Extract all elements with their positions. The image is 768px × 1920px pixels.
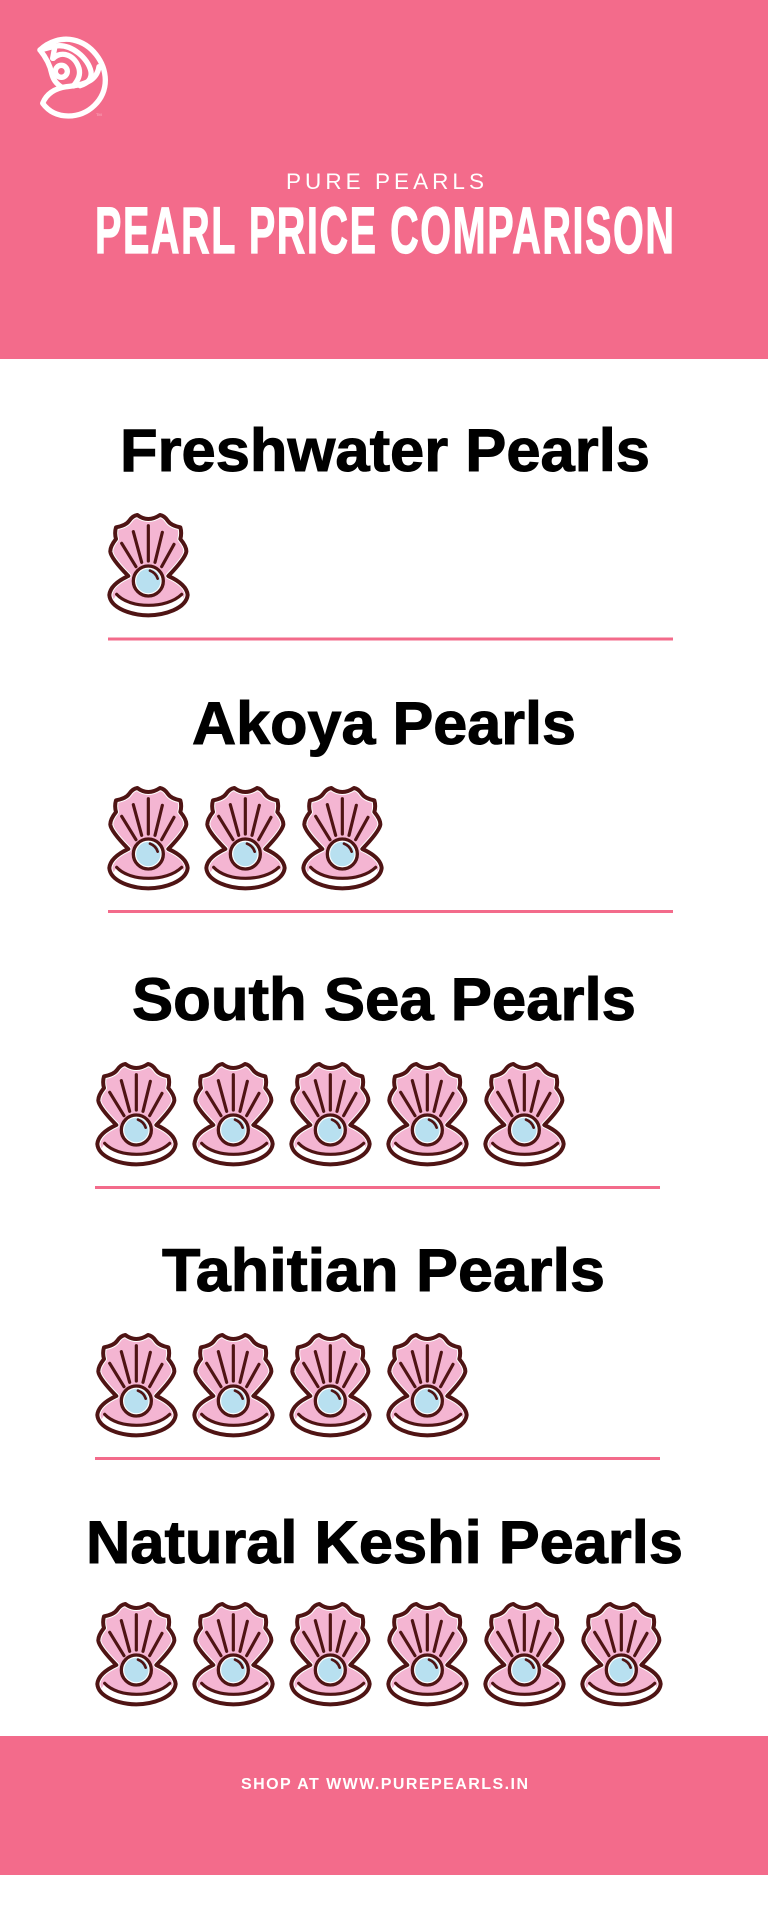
footer band — [0, 1736, 768, 1875]
panel: Natural Keshi Pearls — [86, 1509, 683, 1707]
heading: South Sea Pearls — [132, 966, 636, 1033]
panel: South Sea Pearls — [95, 966, 660, 1189]
logo — [40, 39, 105, 117]
panel: Tahitian Pearls — [95, 1237, 660, 1460]
logo: TM — [96, 112, 102, 117]
heading: Natural Keshi Pearls — [86, 1509, 683, 1576]
panel: Akoya Pearls — [108, 690, 673, 913]
icon: shell rating — [97, 1335, 467, 1438]
footer text: SHOP AT WWW.PUREPEARLS.IN — [241, 1776, 528, 1793]
heading: Tahitian Pearls — [162, 1237, 605, 1304]
heading: Freshwater Pearls — [120, 417, 650, 484]
title: PEARL PRICE COMPARISON — [95, 194, 674, 268]
icon: shell rating — [97, 1604, 661, 1707]
header band — [0, 0, 768, 359]
heading: Akoya Pearls — [192, 690, 576, 757]
brand name: PURE PEARLS — [286, 169, 484, 194]
panel: Freshwater Pearls — [108, 417, 673, 640]
icon: shell rating — [97, 1064, 564, 1167]
icon: shell rating — [109, 788, 382, 891]
icon: shell rating — [109, 515, 188, 618]
